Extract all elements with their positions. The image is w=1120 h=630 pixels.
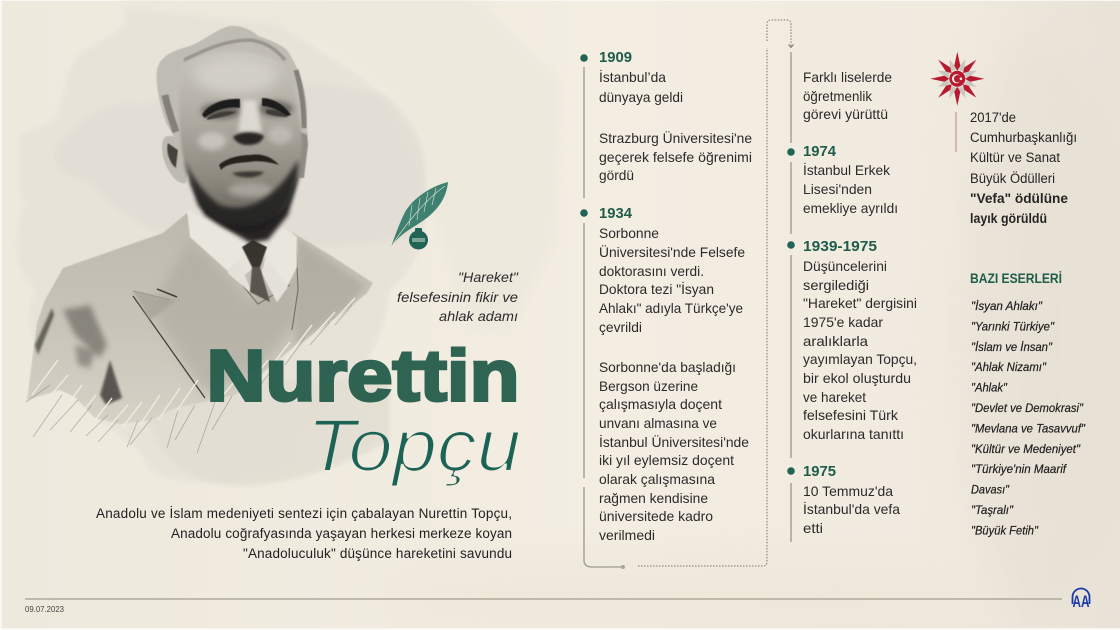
award text: [970, 110, 1077, 226]
title: Topçu: Topçu: [307, 404, 521, 487]
award text: layık görüldü: [970, 211, 1047, 226]
timeline entry: teaching: öğretmenlik: [803, 88, 873, 104]
description: [96, 506, 512, 561]
timeline entry: 1975: etti: [803, 520, 823, 536]
title: Nurettin: Nurettin: [206, 336, 520, 416]
timeline entry: 1974: emekliye ayrıldı: [803, 200, 898, 216]
works list: Davası": [971, 483, 1010, 497]
timeline entry: 1939-1975: sergilediği: [803, 277, 869, 293]
timeline entry: 1974: [803, 143, 898, 216]
subtitle: [397, 269, 519, 324]
timeline entry: 1909: geçerek felsefe öğrenimi: [599, 149, 752, 165]
works list: "İslam ve İnsan": [971, 340, 1053, 354]
portrait photograph: [26, 26, 373, 453]
timeline entry: 1974: Lisesi'nden: [803, 181, 872, 197]
timeline entry: 1934: 1934: [599, 205, 633, 222]
works heading: BAZI ESERLERİ: [970, 271, 1062, 286]
timeline entry: 1939-1975: yayımlayan Topçu,: [803, 351, 917, 367]
chin highlight: [228, 183, 272, 197]
award text: 2017'de: [970, 110, 1016, 125]
timeline entry: 1934: Üniversitesi'nde Felsefe: [599, 243, 745, 260]
subtitle: "Hareket": [458, 269, 519, 285]
timeline entry: 1939-1975: [803, 238, 917, 442]
timeline entry: 1939-1975: 1975'e kadar: [803, 314, 883, 330]
timeline entry: 1934: çevrildi: [599, 319, 642, 335]
works list: "Mevlana ve Tasavvuf": [971, 421, 1086, 435]
timeline entry: 1975: [803, 463, 900, 536]
neck shadow: [190, 170, 300, 243]
forehead light: [194, 58, 278, 94]
timeline entry: teaching: [803, 69, 892, 122]
timeline entry: 1975: 1975: [803, 463, 836, 480]
timeline entry: teaching: görevi yürüttü: [803, 106, 888, 122]
lapel and folds: [133, 240, 298, 398]
AA logo: [1072, 589, 1090, 611]
timeline entry: 1939-1975: "Hareket" dergisini: [803, 295, 917, 311]
works list: "Yarınki Türkiye": [971, 319, 1055, 333]
timeline entry: 1934: Sorbonne: [599, 225, 659, 241]
description: Anadolu ve İslam medeniyeti sentezi için çabalayan Nurettin Topçu,: [96, 506, 512, 521]
timeline entry: 1939-1975: 1939-1975: [803, 238, 877, 255]
award text: "Vefa" ödülüne: [970, 191, 1068, 206]
cheek highlights: [198, 132, 226, 150]
dotted connector between columns: [638, 20, 794, 566]
timeline entry: 1909: [599, 49, 752, 183]
timeline entry: 1939-1975: felsefesini Türk: [803, 407, 899, 423]
hair: [157, 26, 307, 140]
tie: [242, 240, 270, 302]
eyes and brows: [202, 98, 291, 120]
timeline entry: 1934: Ahlakı" adıyla Türkçe'ye: [599, 300, 743, 316]
description: "Anadoluculuk" düşünce hareketini savundu: [243, 546, 512, 561]
timeline entry: 1934: Sorbonne'da başladığı: [599, 359, 736, 375]
timeline entry: 1934: üniversitede kadro: [599, 508, 713, 524]
timeline entry: teaching: Farklı liselerde: [803, 69, 892, 85]
award text: Büyük Ödülleri: [970, 171, 1055, 186]
works list: "Ahlak": [971, 381, 1008, 395]
timeline entry: 1934: olarak çalışmasına: [599, 471, 715, 487]
hair shading: [165, 40, 304, 132]
timeline entry: 1909: gördü: [599, 167, 634, 183]
vest shade: [150, 240, 298, 395]
timeline entry: 1934: iki yıl eylemsiz doçent: [599, 452, 734, 468]
timeline entry: 1934: verilmedi: [599, 527, 655, 543]
timeline entry: 1974: İstanbul Erkek: [803, 161, 891, 178]
timeline entry: 1975: İstanbul'da vefa: [803, 500, 900, 517]
works list: "İsyan Ahlakı": [971, 299, 1043, 313]
works list: "Ahlak Nizamı": [971, 360, 1047, 374]
works list: [971, 299, 1086, 537]
timeline entry: 1939-1975: aralıklarla: [803, 333, 868, 349]
jacket: [27, 213, 373, 424]
icon: feather and ink bottle: [391, 182, 448, 250]
timeline entry: 1934: Doktora tezi "İsyan: [599, 280, 714, 297]
timeline entry: 1934: çalışmasıyla doçent: [599, 396, 722, 412]
brush strokes: dark: [26, 305, 352, 453]
shirt collar: [187, 210, 297, 302]
works list: "Büyük Fetih": [971, 523, 1039, 537]
works list: "Devlet ve Demokrasi": [971, 401, 1084, 415]
works list: "Kültür ve Medeniyet": [971, 442, 1081, 456]
watercolor stains: [16, 0, 560, 486]
award text: Cumhurbaşkanlığı: [970, 130, 1077, 145]
timeline connector: middle column: [787, 52, 795, 542]
nose highlight: [238, 100, 262, 132]
timeline entry: 1974: 1974: [803, 143, 837, 160]
award accent line: [955, 112, 957, 152]
timeline entry: 1939-1975: Düşüncelerini: [803, 258, 887, 274]
sleeve shadows: [63, 305, 107, 358]
left ear: [162, 136, 190, 183]
timeline entry: 1939-1975: ve hareket: [803, 389, 866, 405]
timeline entry: 1934: unvanı almasına ve: [599, 415, 717, 431]
award text: Kültür ve Sanat: [970, 150, 1060, 165]
subtitle: ahlak adamı: [439, 308, 518, 324]
jaw shadow: [184, 160, 298, 233]
eye sockets: [201, 101, 293, 119]
timeline entry: 1934: Bergson üzerine: [599, 378, 698, 394]
icon: presidential award star: [930, 52, 984, 106]
works list: "Taşralı": [971, 503, 1014, 517]
nostrils: [233, 132, 264, 145]
description: Anadolu coğrafyasında yaşayan herkesi merkeze koyan: [171, 526, 512, 541]
works list: "Türkiye'nin Maarif: [971, 462, 1068, 476]
subtitle: felsefesinin fikir ve: [397, 289, 518, 305]
timeline entry: 1934: İstanbul Üniversitesi'nde: [599, 433, 749, 450]
timeline entry: 1934: rağmen kendisine: [599, 490, 708, 506]
timeline entry: 1909: Strazburg Üniversitesi'ne: [599, 129, 752, 146]
brush strokes: light: [32, 298, 355, 428]
footer rule: [25, 598, 1062, 600]
timeline entry: 1939-1975: bir ekol oluşturdu: [803, 370, 911, 386]
timeline entry: 1934: [599, 205, 749, 543]
timeline entry: 1909: 1909: [599, 49, 632, 66]
timeline entry: 1909: dünyaya geldi: [599, 89, 683, 105]
mouth: [219, 154, 279, 170]
right ear: [295, 130, 308, 178]
timeline connector: left column: [580, 54, 624, 568]
date: 09.07.2023: [25, 604, 64, 614]
timeline entry: 1934: doktorasını verdi.: [599, 263, 704, 279]
AA logo: AA: [1072, 592, 1090, 611]
timeline entry: 1975: 10 Temmuz'da: [803, 483, 893, 499]
timeline entry: 1939-1975: okurlarına tanıttı: [803, 426, 904, 442]
face: [179, 52, 302, 226]
timeline entry: 1909: İstanbul’da: [599, 68, 666, 85]
